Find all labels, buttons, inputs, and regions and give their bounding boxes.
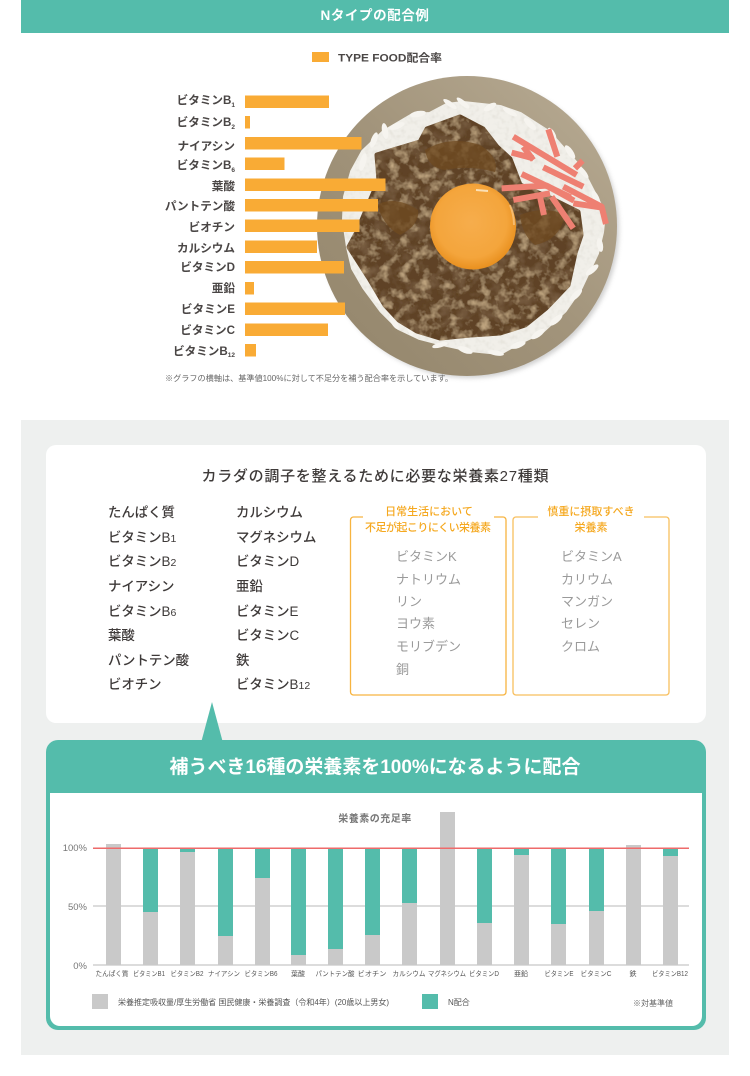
bar chart labels: ナイアシン: [177, 140, 235, 153]
legend: TYPE FOOD: TYPE FOOD配合率: [338, 50, 442, 64]
bar chart labels: ビタミンB: [177, 94, 231, 107]
legend: TYPE FOOD: [312, 50, 442, 64]
box: hard to lack in daily life: リン: [396, 594, 422, 609]
box: hard to lack in daily life: ビタミンK: [396, 549, 457, 564]
bar chart labels: 1: [231, 102, 235, 109]
box: take with care: クロム: [561, 639, 600, 654]
box: take with care: カリウム: [561, 572, 613, 587]
bar chart labels: ビオチン: [189, 220, 235, 234]
panel: nutrients background: [21, 420, 729, 1055]
box: hard to lack in daily life: ナトリウム: [396, 572, 461, 587]
bar chart labels: 2: [231, 124, 235, 131]
box: take with care: セレン: [561, 616, 600, 631]
nutrient list: column 2: ビタミンE: [236, 604, 299, 619]
nutrient list: column 1: [108, 504, 190, 692]
teal formulation bars: [143, 848, 678, 955]
axis labels: 0%: [73, 961, 88, 972]
category labels: ビタミンB1: [133, 969, 165, 978]
bar chart labels: ビタミンB: [177, 159, 231, 172]
axis labels: 50%: [68, 902, 88, 913]
top section header: Nタイプの配合例: [320, 8, 430, 23]
nutrient list: column 2: ビタミンC: [236, 628, 300, 643]
nutrient list: column 1: 葉酸: [108, 628, 135, 643]
category labels: たんぱく質: [96, 969, 128, 978]
photo: gyudon bowl with egg yolk: [317, 76, 619, 378]
category labels: ビタミンB2: [170, 969, 204, 978]
box: hard to lack in daily life: 日常生活において: [385, 504, 473, 518]
panel: 27 essential nutrients: [46, 445, 706, 723]
footnote: ※グラフの横軸は、基準値100%に対して不足分を補う配合率を示しています。: [165, 373, 453, 383]
category labels: 亜鉛: [514, 969, 528, 978]
heading: カラダの調子を整えるために必要な栄養素27種類: [202, 467, 548, 485]
box: take with care: 慎重に摂取すべき: [547, 504, 635, 518]
category labels: [96, 969, 688, 978]
bar chart labels: 亜鉛: [212, 281, 235, 295]
nutrient list: column 2: マグネシウム: [236, 529, 316, 545]
bar chart labels: パントテン酸: [165, 199, 235, 213]
nutrient list: column 2: ビタミンD: [236, 554, 300, 569]
category labels: マグネシウム: [428, 969, 466, 978]
nutrient list: column 2: 亜鉛: [236, 579, 263, 594]
rice grains on edge: [358, 96, 604, 357]
nutrient list: column 2: カルシウム: [236, 505, 303, 520]
bar chart labels: カルシウム: [177, 242, 235, 255]
top section header: [21, 0, 729, 33]
heading: 補うべき16種の栄養素を100%になるように配合: [170, 756, 580, 778]
nutrient list: column 1: ビタミンB6: [108, 604, 176, 619]
category labels: ナイアシン: [208, 970, 240, 978]
category labels: ビタミンB12: [652, 969, 688, 978]
axis labels: 100%: [63, 843, 88, 854]
category labels: ビタミンC: [580, 969, 612, 978]
bar chart labels: 6: [231, 167, 235, 174]
category labels: 鉄: [630, 969, 636, 978]
box: hard to lack in daily life: モリブデン: [396, 639, 461, 654]
bar chart: TYPE FOOD ratio: [245, 96, 386, 356]
category labels: ビタミンD: [469, 969, 499, 978]
box: hard to lack in daily life: [350, 504, 506, 695]
panel: 16 nutrients formulation: [46, 740, 706, 1030]
nutrient list: column 1: ビタミンB1: [108, 530, 176, 545]
category labels: カルシウム: [392, 970, 426, 978]
box: take with care: 栄養素: [574, 520, 608, 534]
chart legend: N配合: [448, 997, 470, 1007]
box: take with care: [513, 504, 669, 695]
nutrient list: column 1: ナイアシン: [108, 579, 174, 594]
pointer triangle: [202, 702, 222, 741]
box: take with care: ビタミンA: [561, 549, 622, 564]
bar chart labels: ビタミンB: [177, 116, 231, 129]
bar chart labels: 12: [228, 352, 235, 359]
grey intake bars: [106, 812, 678, 965]
nutrient list: column 1: たんぱく質: [108, 504, 175, 520]
category labels: ビタミンB6: [244, 969, 278, 978]
nutrient list: column 2: ビタミンB12: [236, 677, 310, 692]
bar chart labels: ビタミンE: [181, 302, 235, 316]
nutrient list: column 1: ビオチン: [108, 677, 162, 692]
chart title: 栄養素の充足率: [338, 812, 412, 825]
glossy beef patches: [377, 141, 565, 245]
box: hard to lack in daily life: 銅: [396, 662, 409, 677]
chart legend: [92, 994, 470, 1009]
category labels: パントテン酸: [316, 969, 354, 978]
nutrient list: column 1: ビタミンB2: [108, 554, 176, 569]
bar chart labels: [165, 93, 236, 359]
nutrient list: column 2: [236, 505, 316, 692]
category labels: 葉酸: [291, 969, 305, 978]
box: hard to lack in daily life: ヨウ素: [396, 616, 435, 631]
bar chart labels: ビタミンD: [180, 260, 235, 274]
stacked bar chart: sufficiency rate: [63, 812, 689, 978]
red pickled ginger: [502, 129, 606, 228]
rice: [345, 104, 603, 352]
bar chart labels: ビタミンB: [173, 345, 228, 358]
bar chart labels: ビタミンC: [180, 323, 236, 337]
category labels: ビタミンE: [544, 969, 574, 978]
egg yolk: [430, 184, 516, 270]
bar chart labels: 葉酸: [212, 179, 235, 193]
nutrient list: column 1: パントテン酸: [108, 653, 190, 668]
axis labels: [63, 843, 88, 972]
note: relative to reference value: ※対基準値: [633, 998, 673, 1008]
box: hard to lack in daily life: 不足が起こりにくい栄養素: [365, 520, 491, 534]
nutrient list: column 2: 鉄: [236, 652, 250, 668]
category labels: ビオチン: [358, 969, 386, 978]
chart legend: 栄養推定吸収量/厚生労働省 国民健康・栄養調査（令和4年）(20歳以上男女): [118, 997, 389, 1007]
box: take with care: マンガン: [561, 594, 613, 609]
beef topping: [349, 117, 581, 338]
